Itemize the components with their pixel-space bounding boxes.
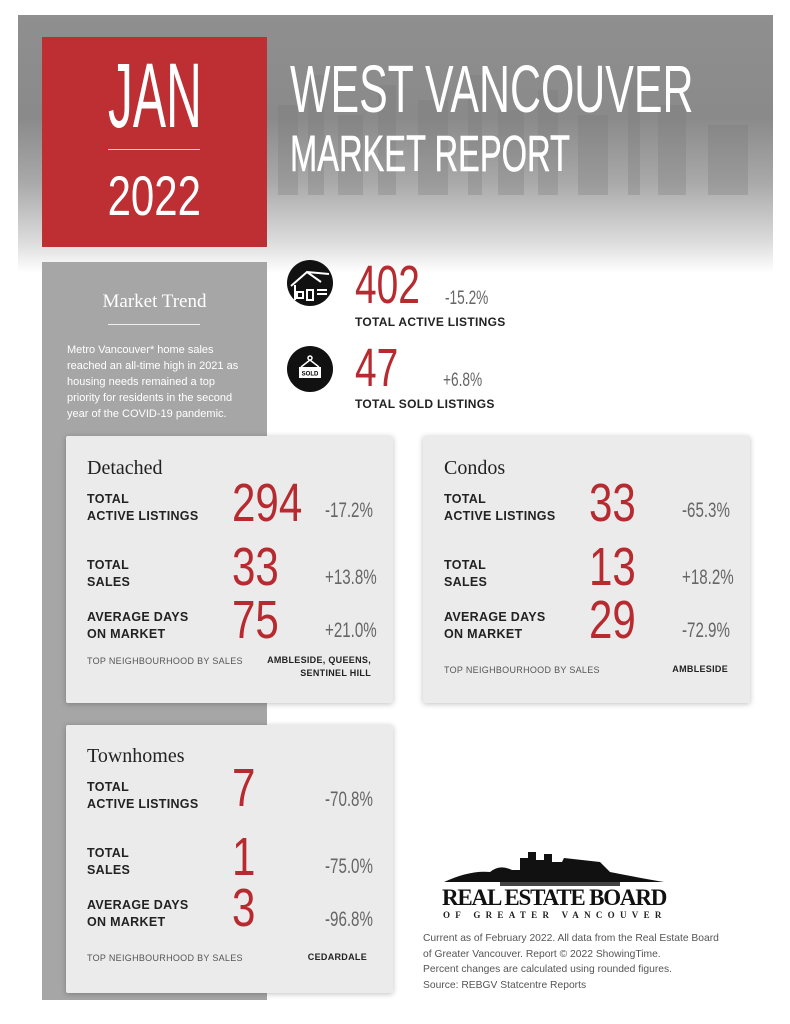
panel: detached: ON MARKET xyxy=(87,626,165,640)
panel: condos: 33 xyxy=(589,473,636,533)
panel: condos: TOTAL xyxy=(444,558,486,572)
panel: townhomes: SALES xyxy=(87,862,130,876)
stat: active listings xyxy=(355,255,506,329)
panel: detached: SENTINEL HILL xyxy=(300,668,371,678)
panel: townhomes: ACTIVE LISTINGS xyxy=(87,796,198,810)
icon: sold sign xyxy=(287,346,333,392)
year: 2022 xyxy=(108,164,201,227)
title: WEST VANCOUVER xyxy=(290,52,693,127)
heading: Detached xyxy=(87,457,163,479)
stat: active listings: 402 xyxy=(355,255,420,315)
panel: condos: ACTIVE LISTINGS xyxy=(444,508,555,522)
panel: townhomes: -96.8% xyxy=(325,908,373,931)
panel: detached: 33 xyxy=(232,537,279,597)
title xyxy=(290,52,693,182)
panel: detached: +21.0% xyxy=(325,619,377,642)
panel: condos: 29 xyxy=(589,590,636,650)
panel: townhomes: TOP NEIGHBOURHOOD BY SALES xyxy=(87,953,243,963)
sidebar paragraph: Metro Vancouver* home sales reached an all-time high in 2021 as housing needs remained a top priority for residents in the second year of the COVID-19 pandemic. xyxy=(67,344,238,420)
month: JAN xyxy=(108,45,201,147)
title: MARKET REPORT xyxy=(290,125,570,182)
panel: condos: 13 xyxy=(589,537,636,597)
panel: detached xyxy=(66,436,393,703)
panel: detached: ACTIVE LISTINGS xyxy=(87,508,198,522)
panel: detached: TOP NEIGHBOURHOOD BY SALES xyxy=(87,656,243,666)
panel: detached: 75 xyxy=(232,590,279,650)
heading: Condos xyxy=(444,457,505,479)
logo: real estate board: REAL ESTATE BOARD xyxy=(442,885,666,910)
panel: townhomes: ON MARKET xyxy=(87,914,165,928)
panel: condos: TOTAL xyxy=(444,492,486,506)
footer note: Source: REBGV Statcentre Reports xyxy=(423,980,586,991)
panel: townhomes: -70.8% xyxy=(325,788,373,811)
panel: townhomes: -75.0% xyxy=(325,855,373,878)
icon: house xyxy=(287,260,333,306)
panel: detached: 294 xyxy=(232,473,302,533)
footer note: Current as of February 2022. All data from the Real Estate Board xyxy=(423,933,719,944)
sidebar: market trend xyxy=(42,262,267,1000)
panel: townhomes xyxy=(66,725,393,993)
banner background xyxy=(18,15,773,273)
panel: detached: TOTAL xyxy=(87,558,129,572)
panel: detached: TOTAL xyxy=(87,492,129,506)
panel: detached: -17.2% xyxy=(325,499,373,522)
red date box xyxy=(42,37,267,247)
stat: sold listings: TOTAL SOLD LISTINGS xyxy=(355,397,495,411)
panel: condos: TOP NEIGHBOURHOOD BY SALES xyxy=(444,665,600,675)
panel: detached: AMBLESIDE, QUEENS, xyxy=(267,655,371,665)
panel: condos: ON MARKET xyxy=(444,626,522,640)
panel: townhomes: CEDARDALE xyxy=(308,952,367,962)
footer note: Percent changes are calculated using rounded figures. xyxy=(423,964,672,975)
panel: detached: SALES xyxy=(87,574,130,588)
panel: condos: +18.2% xyxy=(682,566,734,589)
panel: condos: -72.9% xyxy=(682,619,730,642)
icon: sold sign: SOLD xyxy=(302,372,319,378)
panel: condos: SALES xyxy=(444,574,487,588)
sidebar heading: Market Trend xyxy=(102,291,206,312)
panel: townhomes: TOTAL xyxy=(87,846,129,860)
panel: townhomes: AVERAGE DAYS xyxy=(87,898,189,912)
stat: sold listings xyxy=(355,338,495,411)
stat: sold listings: 47 xyxy=(355,338,398,398)
heading: Townhomes xyxy=(87,745,184,767)
logo: real estate board: OF GREATER VANCOUVER xyxy=(443,910,667,920)
panel: townhomes: 1 xyxy=(232,827,255,887)
panel: condos: AVERAGE DAYS xyxy=(444,610,546,624)
panel: townhomes: TOTAL xyxy=(87,780,129,794)
footer note: of Greater Vancouver. Report © 2022 ShowingTime. xyxy=(423,949,661,960)
panel: condos: -65.3% xyxy=(682,499,730,522)
stat: sold listings: +6.8% xyxy=(443,370,482,391)
logo: real estate board xyxy=(442,852,667,920)
panel: townhomes: 3 xyxy=(232,878,255,938)
stat: active listings: -15.2% xyxy=(445,288,488,309)
footer note xyxy=(423,933,719,991)
panel: detached: AVERAGE DAYS xyxy=(87,610,189,624)
stat: active listings: TOTAL ACTIVE LISTINGS xyxy=(355,315,506,329)
panel: condos: AMBLESIDE xyxy=(672,664,728,674)
panel: townhomes: 7 xyxy=(232,758,255,818)
panel: detached: +13.8% xyxy=(325,566,377,589)
panel: condos xyxy=(423,436,750,703)
